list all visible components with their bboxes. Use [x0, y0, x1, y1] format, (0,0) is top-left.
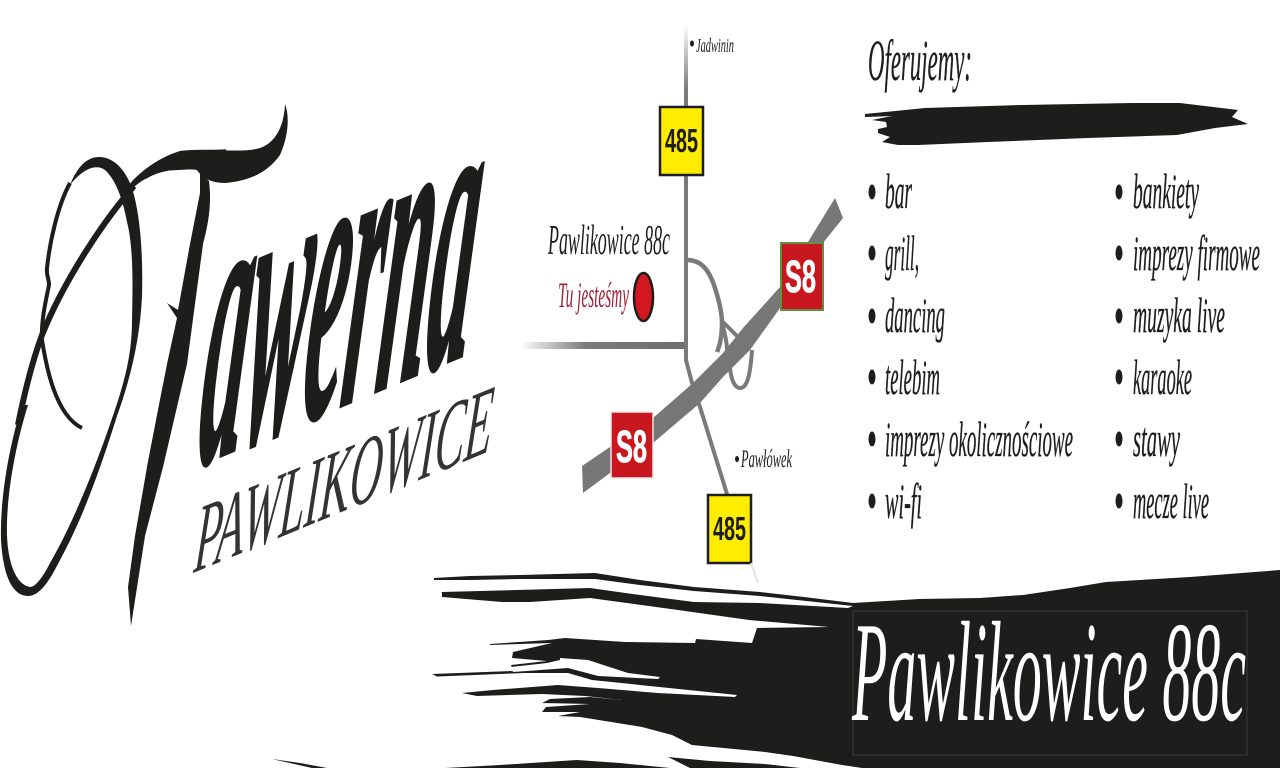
title: Tawerna	[0, 104, 485, 626]
sign: S8 upper: S8	[785, 251, 816, 302]
brush strands: lower edge	[272, 757, 800, 768]
label: Jadwinin: Jadwinin	[696, 35, 734, 57]
list: offer column 2: stawy	[1133, 411, 1180, 467]
road: interchange ramps	[687, 260, 752, 388]
road: west access	[520, 342, 685, 349]
subtitle: Pawlikowice: PAWLIKOWICE	[191, 364, 498, 595]
label: Pawłówek	[735, 446, 792, 473]
sign: road 485 north: 485	[665, 122, 698, 159]
road: S8 expressway	[582, 198, 843, 493]
icon: location marker	[634, 273, 653, 321]
sign: S8 lower: S8	[616, 421, 647, 472]
road: north-south 485	[684, 25, 727, 494]
title: Tawerna: T	[79, 0, 245, 745]
sign: road 485 north	[660, 107, 703, 175]
guide frame inside brush	[853, 611, 1247, 755]
panel: offer	[865, 28, 1260, 529]
list: offer column 1: dancing	[885, 287, 945, 343]
banner: address on brush stroke	[272, 570, 1280, 768]
sign: S8 lower	[611, 412, 653, 478]
brush stroke under heading	[865, 103, 1248, 145]
list: offer column 1: grill,	[885, 225, 919, 281]
logo: Tawerna Pawlikowice	[0, 104, 495, 626]
brush stroke: top strands and right body	[432, 570, 1280, 768]
brush gaps	[425, 579, 853, 697]
list: offer column 2	[1116, 163, 1260, 529]
sign: road 485 south: 485	[713, 510, 746, 547]
list: offer column 1: wi-fi	[885, 473, 922, 529]
sign: S8 upper	[781, 243, 823, 310]
map: route to Pawlikowice 88c: Tu jesteśmy	[558, 275, 629, 315]
label: Pawłówek: Pawłówek	[741, 446, 792, 473]
list: offer column 1	[868, 163, 1073, 529]
sign: road 485 south	[708, 495, 751, 563]
panel: offer: Oferujemy:	[868, 28, 972, 93]
label: Jadwinin	[690, 35, 734, 57]
map: route to Pawlikowice 88c: Pawlikowice 88c	[548, 218, 670, 264]
title: Tawerna: awerna	[186, 0, 503, 555]
list: offer column 1: bar	[885, 163, 912, 219]
list: offer column 1: telebim	[885, 349, 940, 405]
map: route to Pawlikowice 88c	[520, 25, 843, 583]
